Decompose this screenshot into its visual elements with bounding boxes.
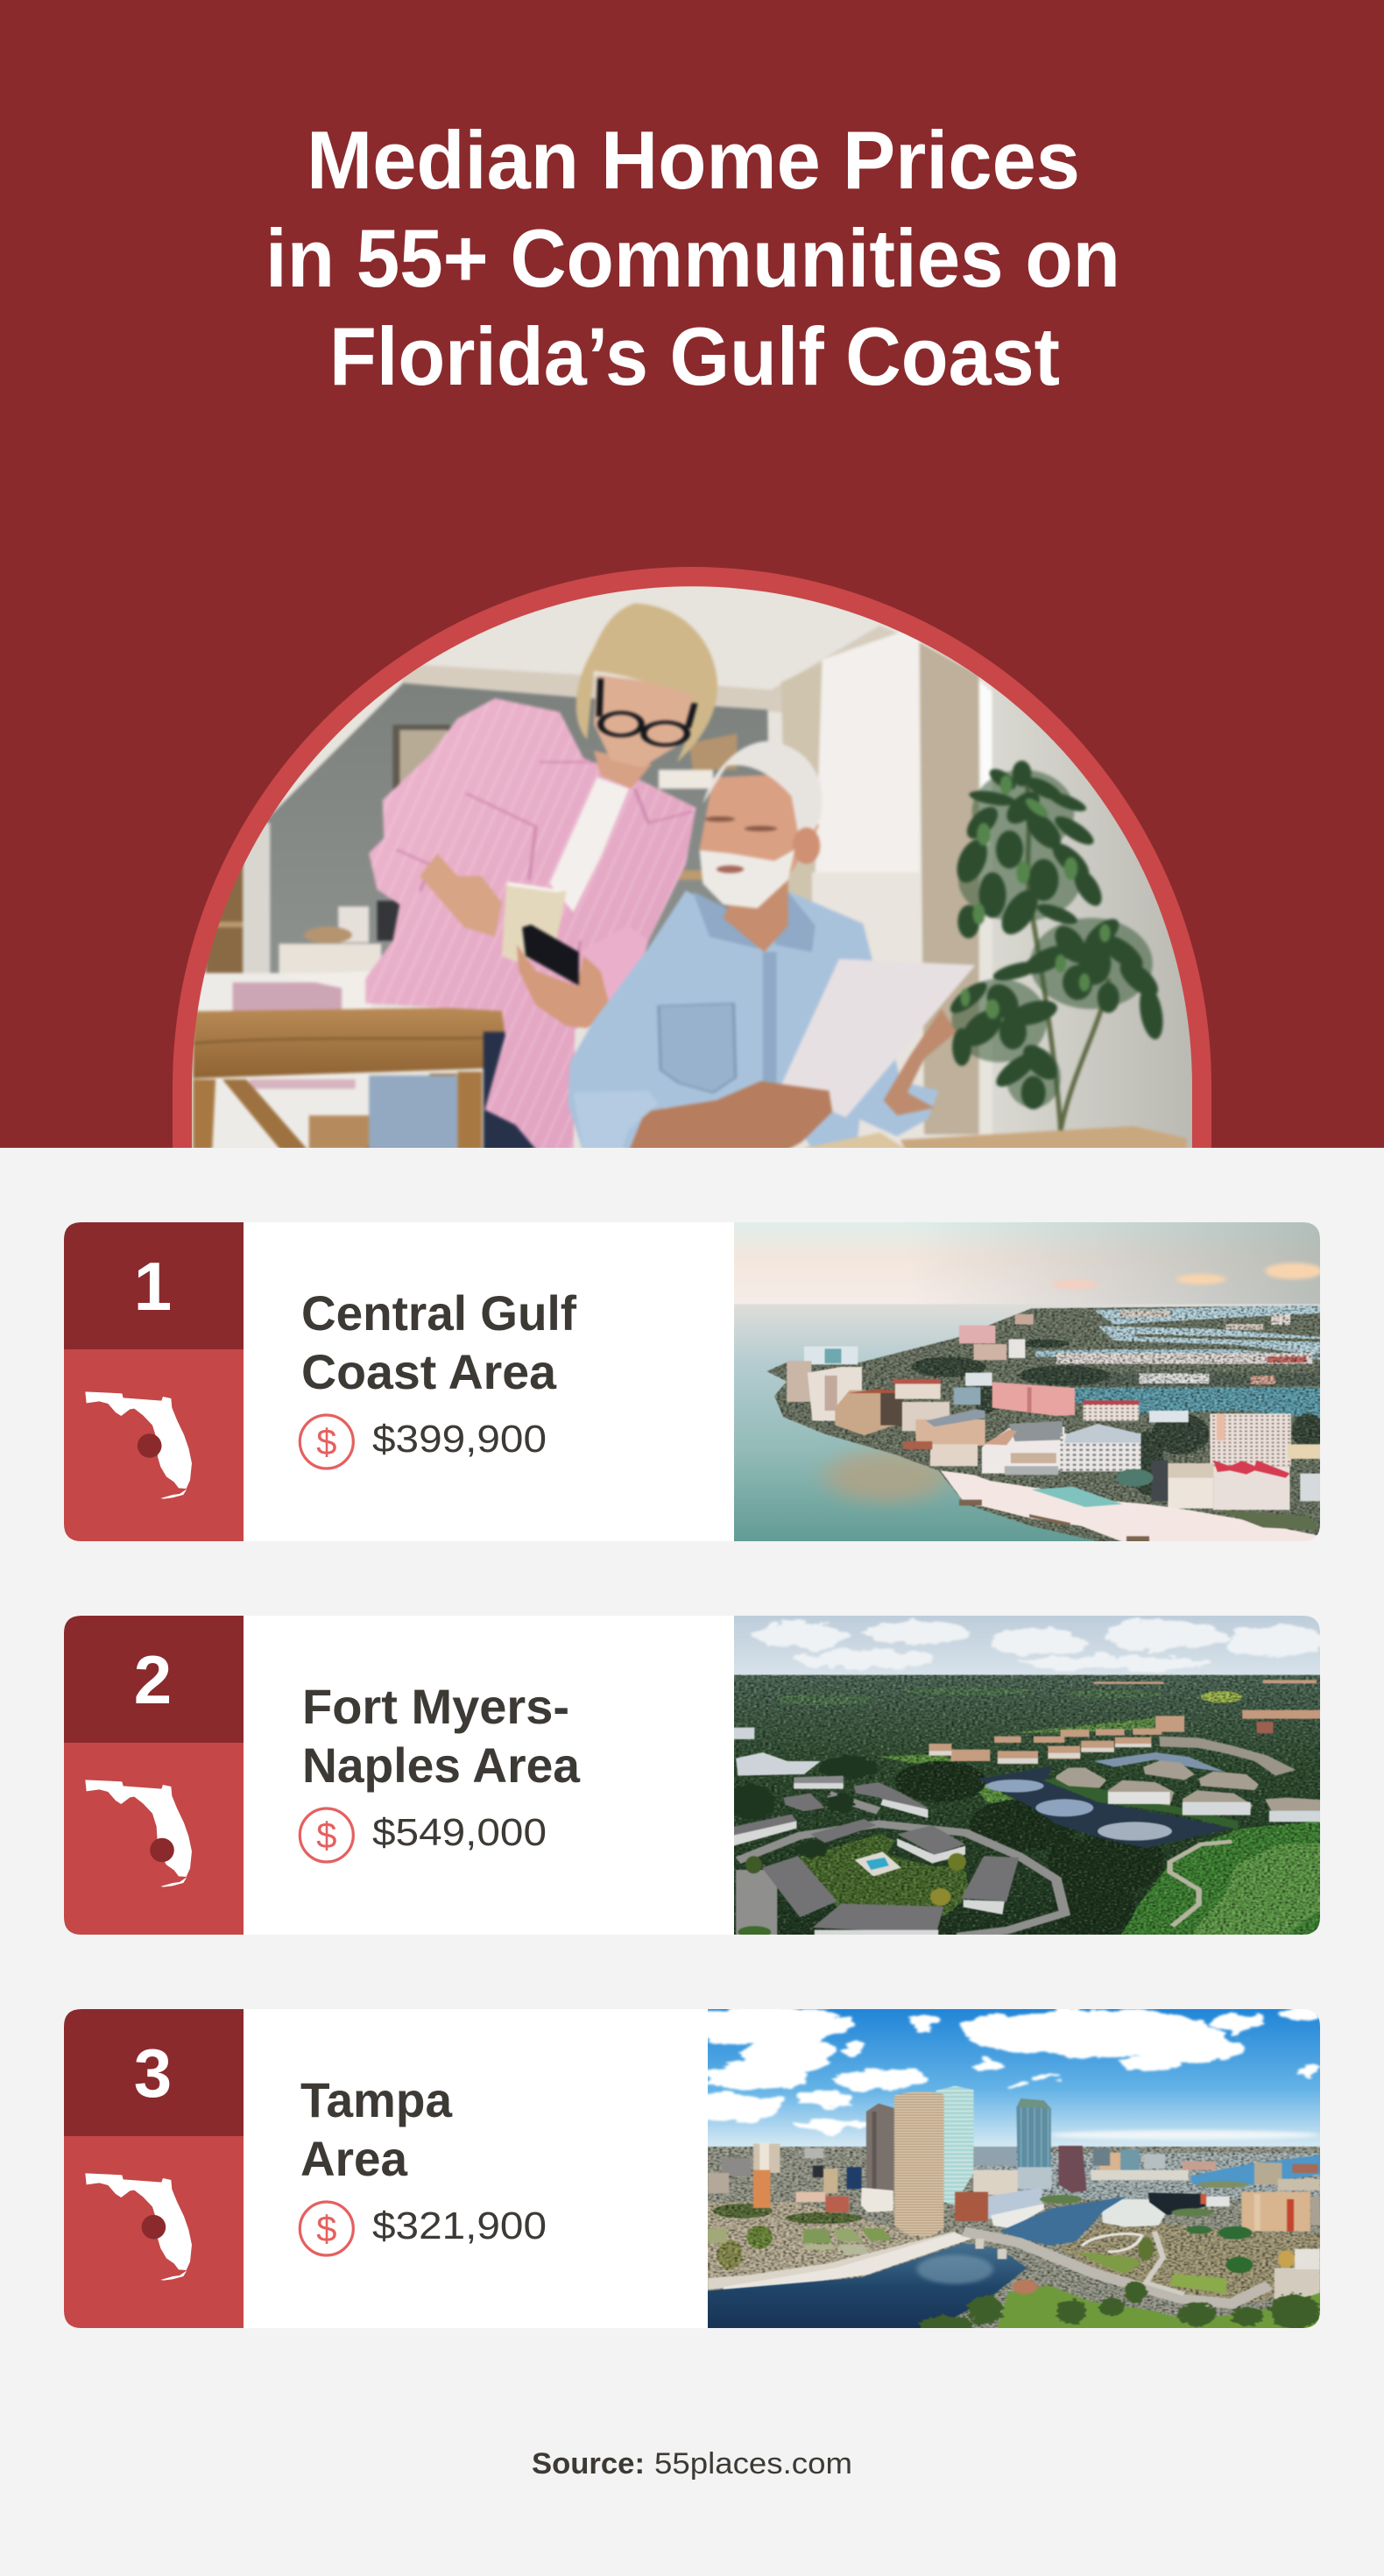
sand reflection <box>825 1450 949 1503</box>
ground base and distant city <box>692 2147 1337 2333</box>
foreground trees <box>738 1853 966 1938</box>
man's denim shirt <box>568 890 939 1153</box>
icon: Florida map <box>85 1780 192 1887</box>
rank number: 3 <box>134 2035 172 2112</box>
white hotels <box>903 1421 1141 1475</box>
side table and decor <box>279 901 405 974</box>
canal-front houses <box>1056 1353 1321 1386</box>
map marker <box>150 1838 174 1862</box>
park lawn <box>1076 2226 1253 2294</box>
card 3: Tampa Area <box>64 2004 1337 2333</box>
bridge and road <box>964 2232 1269 2304</box>
woman's hair <box>576 604 717 762</box>
source line: 55places.com <box>654 2447 852 2480</box>
tan-roof condos back row <box>929 1716 1184 1764</box>
curtains <box>781 626 992 1135</box>
teal tower <box>936 2086 974 2205</box>
clouds <box>751 1621 1325 1671</box>
tree canopy texture <box>775 1687 1242 1705</box>
man's head <box>700 774 819 895</box>
bridge arches <box>975 2239 1006 2259</box>
map block <box>64 1349 244 1541</box>
woman's face <box>594 675 696 768</box>
mug <box>502 881 567 961</box>
bookcase <box>205 823 270 982</box>
phone hand <box>517 945 618 1028</box>
rank block <box>64 1616 244 1743</box>
photo: golf community aerial <box>725 1612 1329 1941</box>
man's beard <box>700 850 794 909</box>
area name: Fort Myers- <box>302 1679 569 1734</box>
sky <box>692 2004 1337 2158</box>
rank block <box>64 2009 244 2136</box>
clouds <box>683 2006 1318 2131</box>
shirt shading <box>396 761 693 985</box>
fairway back <box>1006 1718 1155 1733</box>
area name <box>302 1679 581 1793</box>
header panel <box>0 0 1384 1148</box>
river upper reach <box>999 2197 1127 2246</box>
glass tower <box>1016 2098 1052 2189</box>
island land mass <box>767 1306 1329 1545</box>
golf course <box>1119 1821 1329 1939</box>
houseplant <box>943 761 1166 1130</box>
river <box>692 2243 1027 2333</box>
back bay water <box>1035 1305 1329 1360</box>
beach umbrellas and palms <box>1032 1469 1321 1531</box>
icon: Florida map <box>85 2173 192 2281</box>
rank block <box>64 1222 244 1349</box>
white undershirt <box>549 777 629 912</box>
card panel <box>244 1222 743 1541</box>
man's hair <box>703 741 822 853</box>
upper-left dark trees <box>725 1755 879 1858</box>
chair <box>193 1007 509 1150</box>
card 1: Central Gulf Coast Area <box>64 1218 1329 1546</box>
lakeside condos <box>1056 1760 1321 1822</box>
arch frame <box>173 567 1211 1148</box>
right waterfront <box>1101 2192 1320 2232</box>
golf path <box>1170 1842 1232 1926</box>
picture frame <box>392 725 451 789</box>
shelf and basket <box>659 733 737 880</box>
back islands <box>1120 1310 1321 1342</box>
area name <box>300 2072 453 2186</box>
icon: dollar coin: $ <box>316 1815 336 1856</box>
icon: dollar coin: $ <box>316 1421 336 1462</box>
area name: Naples Area <box>302 1737 581 1793</box>
photo: Clearwater Beach aerial <box>725 1218 1329 1546</box>
cornice <box>396 626 897 712</box>
central tree belt <box>895 1761 1164 1936</box>
source line <box>532 2447 852 2480</box>
woman's jeans <box>369 1032 540 1153</box>
shirt pocket and collar <box>659 891 816 1104</box>
title: in 55+ Communities on <box>265 212 1120 304</box>
icon: dollar coin <box>300 1415 353 1468</box>
rank number: 1 <box>134 1248 172 1325</box>
waterfront blocks <box>955 2170 1044 2228</box>
distant rooftops <box>1093 1680 1321 1733</box>
lawns <box>783 1834 970 1916</box>
hero photo: couple reviewing paperwork <box>192 586 1192 1148</box>
card panel <box>244 2009 717 2328</box>
room ceiling <box>192 586 995 1148</box>
card panel <box>244 1616 743 1935</box>
woman's forearm and hand <box>420 853 502 937</box>
area name: Central Gulf <box>301 1285 576 1341</box>
sunset clouds <box>1052 1263 1323 1289</box>
condo walls <box>929 1744 1151 1764</box>
river highlight <box>917 2254 993 2284</box>
title <box>265 114 1120 402</box>
area name: Tampa <box>300 2072 453 2127</box>
groin rocks <box>959 1500 1149 1542</box>
bed and pillows <box>199 971 378 1156</box>
maroon tower <box>1058 2146 1086 2193</box>
sky <box>725 1218 1329 1306</box>
area name <box>301 1285 576 1399</box>
price: $399,900 <box>372 1418 547 1461</box>
grey-roof row by pond <box>1160 1737 1296 1776</box>
street trees <box>713 2204 862 2269</box>
sleeve <box>574 1091 659 1153</box>
white upper-left houses <box>725 1728 821 1776</box>
foreground park <box>995 2285 1329 2333</box>
man's ear <box>793 827 820 864</box>
far riverbank greens <box>1040 2181 1248 2217</box>
icon: dollar coin <box>300 2202 353 2255</box>
road and parking <box>738 1794 1064 1936</box>
pond banks <box>1043 1779 1238 1829</box>
card 2: Fort Myers-Naples Area <box>64 1612 1329 1941</box>
foreground trees <box>919 2282 1320 2333</box>
title: Florida’s Gulf Coast <box>329 310 1060 402</box>
left towers <box>708 2143 862 2212</box>
island scene <box>767 1305 1329 1545</box>
area name: Area <box>300 2131 408 2186</box>
grey-roof apartments <box>725 1776 1019 1934</box>
distant forest <box>725 1675 1329 1941</box>
main canal <box>1075 1387 1329 1419</box>
dark tower <box>861 2104 894 2212</box>
fairway light <box>1186 1843 1329 1939</box>
woman's pink shirt <box>365 698 696 1153</box>
sea <box>725 1304 1329 1546</box>
right tower with red roofs <box>1151 1413 1321 1510</box>
terracotta path <box>1013 2280 1038 2294</box>
title: Median Home Prices <box>307 114 1080 206</box>
man's eyes and mouth <box>705 817 777 873</box>
man's neck <box>724 880 788 952</box>
foreground hand and arm <box>628 1081 832 1153</box>
photo: downtown Tampa skyline <box>683 2004 1337 2333</box>
pond sky reflection <box>986 1780 1172 1841</box>
right wall <box>992 683 1200 1153</box>
cylindrical tower <box>894 2091 944 2237</box>
park lawns <box>708 2228 892 2254</box>
grey wall <box>246 683 771 979</box>
oval driveway <box>1083 2233 1141 2252</box>
beach <box>941 1470 1329 1545</box>
price: $321,900 <box>372 2204 547 2247</box>
sky <box>725 1612 1329 1678</box>
map marker <box>138 1433 161 1458</box>
domed courthouse <box>1275 2249 1320 2298</box>
near fairway <box>879 1754 1019 1808</box>
woman's sleeve cuff <box>580 925 648 1011</box>
far hand <box>884 1009 957 1115</box>
map block <box>64 1743 244 1935</box>
map block <box>64 2136 244 2328</box>
icon: Florida map <box>85 1391 192 1499</box>
left blocks and promenade land <box>692 2202 959 2289</box>
pool <box>855 1851 901 1877</box>
icon: dollar coin: $ <box>316 2208 336 2249</box>
far shore land <box>1057 2223 1329 2304</box>
paper <box>780 959 976 1117</box>
table <box>805 1126 1187 1153</box>
far bay <box>1190 2154 1329 2184</box>
background mid towers <box>974 2147 1320 2190</box>
parking lot <box>736 1870 777 1940</box>
pink and tan towers <box>787 1314 1189 1446</box>
woman's neck <box>594 751 652 789</box>
ground scene <box>725 1675 1329 1941</box>
area name: Coast Area <box>301 1344 557 1399</box>
icon: dollar coin <box>300 1808 353 1862</box>
pond <box>978 1766 1232 1848</box>
rank number: 2 <box>134 1641 172 1718</box>
horizon haze clouds <box>1049 2130 1320 2140</box>
source line: Source: <box>532 2447 645 2480</box>
map marker <box>142 2215 166 2240</box>
apartment walls <box>725 1783 1005 1936</box>
riverwalk <box>708 2232 959 2289</box>
phone <box>522 924 579 986</box>
tree clusters <box>912 1339 1325 1496</box>
upper pond <box>1093 1752 1225 1773</box>
glasses <box>599 678 695 745</box>
price: $549,000 <box>372 1811 547 1854</box>
